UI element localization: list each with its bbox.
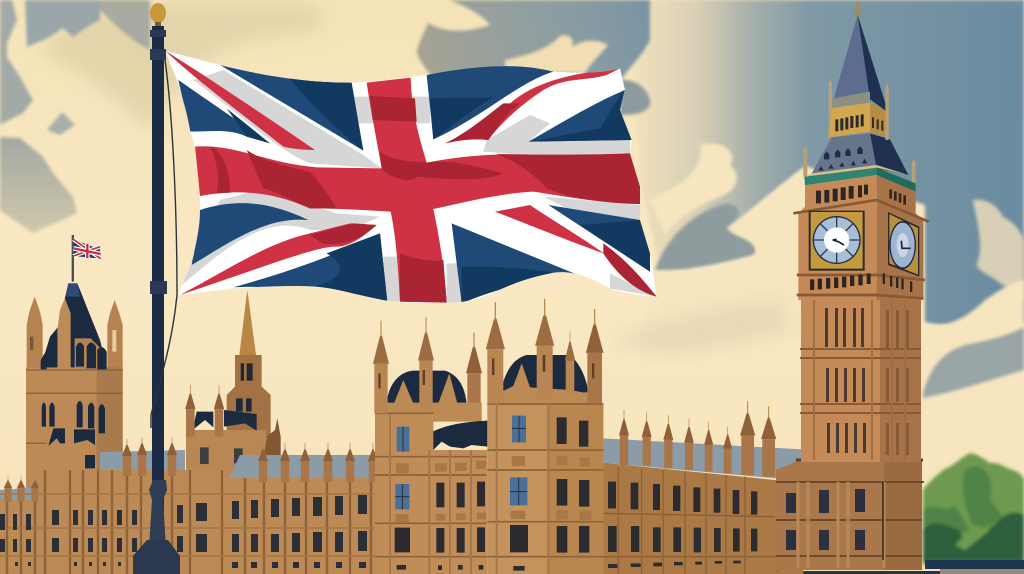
grey cloud, right of flag — [655, 204, 756, 270]
panel details — [395, 456, 591, 522]
central tower and spire — [185, 290, 281, 490]
roofs — [0, 450, 372, 500]
spire — [832, 15, 870, 106]
finial — [853, 1, 863, 17]
clock face, front — [809, 211, 865, 271]
grey cloud band, lower right — [923, 327, 1024, 398]
gables, tower A — [394, 373, 457, 403]
collars — [150, 30, 167, 294]
tower body — [26, 367, 123, 491]
white field — [166, 51, 656, 303]
dark windows — [395, 417, 589, 571]
cornice — [793, 200, 929, 298]
red diagonals — [165, 51, 657, 297]
wing windows — [558, 482, 796, 570]
wing body — [0, 470, 375, 574]
pole base — [133, 540, 180, 574]
windows — [200, 447, 243, 464]
dark parapets — [193, 410, 257, 431]
halyard rope — [151, 60, 177, 428]
red cross — [195, 78, 641, 303]
Elizabeth Tower, belfry and clock — [793, 1, 929, 300]
Union flag — [166, 51, 656, 303]
pole shaft — [152, 26, 164, 526]
flagpole — [133, 3, 180, 574]
belfry — [828, 103, 888, 137]
tower roof — [40, 283, 107, 370]
front gable — [75, 338, 107, 367]
ground strip — [700, 560, 1024, 574]
gold finial — [150, 3, 166, 26]
upper shaft, front — [798, 175, 877, 300]
cream cloud, lower right — [922, 280, 1024, 490]
clock face, side — [888, 212, 919, 277]
pinnacles and turrets — [373, 321, 389, 413]
cream cloud flecks, top centre — [505, 35, 608, 73]
spire — [239, 290, 256, 355]
pale cloud, far right — [973, 200, 1024, 300]
tower A upper — [375, 403, 482, 452]
small flagpole — [72, 235, 74, 282]
tower B — [487, 403, 603, 574]
pinnacles — [803, 80, 916, 183]
small grey cloud behind flag — [620, 80, 650, 115]
recess turret, tower A — [466, 332, 482, 420]
stone bands — [375, 404, 603, 557]
grey clouds, upper left — [0, 0, 150, 233]
base windows — [786, 489, 865, 550]
Commons block and central towers — [373, 299, 803, 574]
wing body — [603, 463, 803, 574]
tower A body — [375, 450, 487, 574]
pinnacles — [4, 476, 12, 502]
windows — [0, 495, 367, 568]
lower roof — [812, 133, 877, 173]
long east wing — [558, 401, 803, 574]
arched openings — [41, 337, 107, 433]
dark roofs — [387, 355, 588, 404]
turrets — [27, 297, 123, 370]
blue windows — [395, 416, 527, 509]
base block — [776, 460, 922, 570]
west wings — [0, 437, 378, 574]
dark red folds — [210, 96, 657, 303]
buttresses — [7, 470, 371, 574]
cream clouds, right of flag — [640, 143, 806, 340]
lower flare — [149, 480, 167, 547]
parapet shadows — [48, 428, 95, 468]
recessed dark roof, tower A — [433, 421, 487, 451]
grey storm cloud, top centre — [417, 0, 650, 90]
white shadow bands — [180, 70, 657, 303]
shaft window slits — [825, 308, 866, 453]
belfry windows — [810, 185, 912, 292]
slate roof — [603, 438, 802, 478]
clock hands — [833, 239, 844, 245]
Elizabeth Tower, lower shaft and base — [776, 280, 924, 570]
small union flag — [73, 239, 101, 259]
pale haze, upper left — [40, 5, 320, 130]
upper shaft, side — [877, 175, 923, 300]
blue sky, upper right — [630, 0, 1024, 327]
blue panels — [178, 65, 650, 303]
tree — [923, 453, 1024, 565]
turrets — [185, 385, 196, 437]
dark blue folds — [227, 78, 650, 303]
lantern — [227, 355, 271, 438]
faint cloud, centre right — [610, 300, 790, 353]
shaft — [801, 280, 880, 462]
tower block — [186, 430, 266, 490]
side clock hands — [901, 241, 911, 248]
Victoria Tower — [26, 235, 123, 491]
wing pinnacles — [619, 410, 629, 465]
green band — [804, 168, 877, 185]
